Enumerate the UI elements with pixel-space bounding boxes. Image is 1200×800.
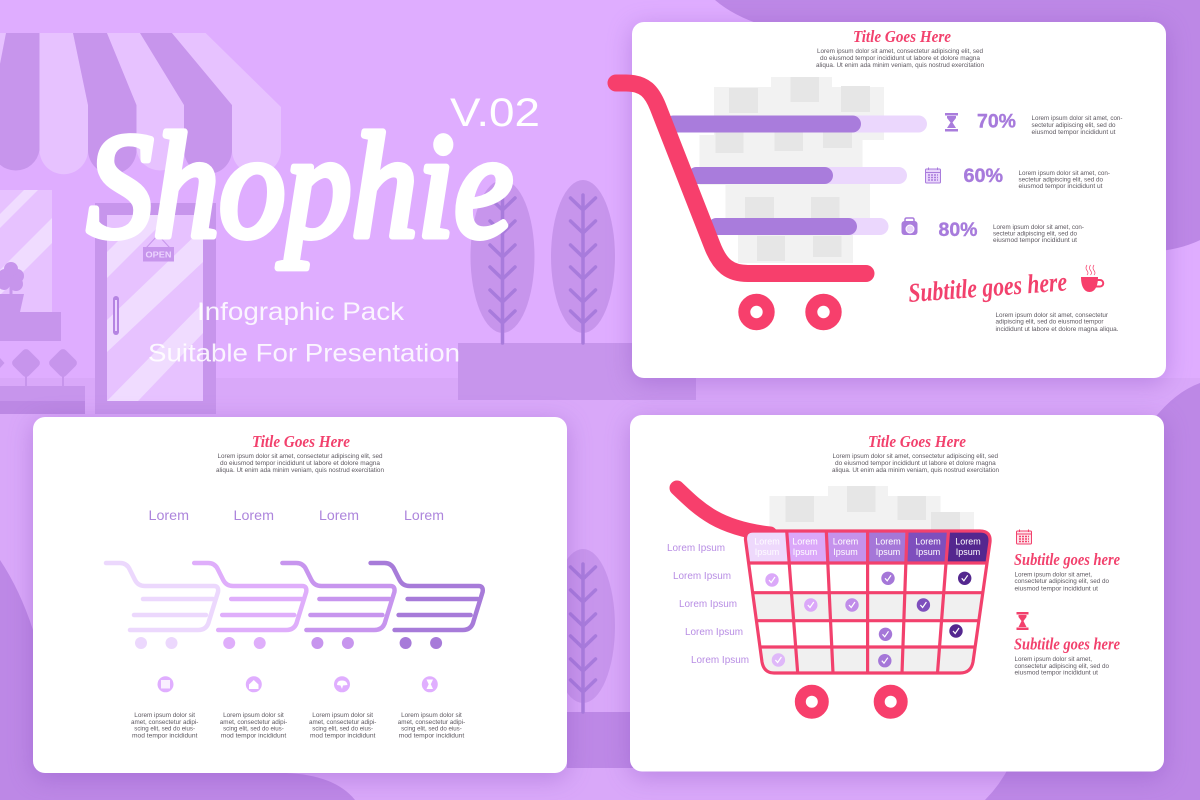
shop window: [0, 190, 52, 312]
open sign: OPEN: [146, 250, 172, 260]
intro text: Lorem ipsum dolor sit amet, consectetur adipiscing elit, sed: [218, 453, 383, 460]
subtitle 2: Subtitle goes here: [1014, 634, 1120, 654]
intro text: do eiusmod tempor incididunt ut labore et dolore magna: [835, 460, 996, 467]
column text 1: amet, consectetur adipi-: [131, 719, 198, 726]
header labels: Ipsum: [916, 547, 940, 557]
intro text: aliqua. Ut enim ada minim veniam, quis nostrud exercitation: [216, 467, 385, 474]
text block 60%: Lorem ipsum dolor sit amet, con-: [1018, 170, 1110, 177]
column text 3: [309, 712, 376, 739]
header labels: [754, 536, 981, 557]
cart wheel right: [811, 300, 836, 324]
tree 1: [470, 180, 534, 343]
icon: hourglass badge: [422, 676, 438, 692]
icon: hourglass: [1016, 612, 1028, 630]
header labels: Ipsum: [833, 547, 858, 557]
column text 1: [131, 712, 198, 739]
bar 70%: [665, 116, 927, 132]
icon: calendar badge: [158, 676, 174, 692]
awning: [0, 33, 281, 174]
column text 3: scing elit, sed do eius-: [312, 726, 373, 733]
version: V.02: [450, 91, 540, 135]
column text 3: mod tempor incididunt: [310, 732, 376, 739]
header labels: Ipsum: [755, 547, 779, 557]
icon: home badge: [246, 676, 262, 692]
header labels: Lorem: [792, 536, 818, 546]
text block 2: consectetur adipiscing elit, sed do: [1014, 663, 1110, 670]
intro text: do eiusmod tempor incididunt ut labore et dolore magna: [820, 55, 981, 62]
column text 4: amet, consectetur adipi-: [398, 719, 465, 726]
panel: four carts: [33, 417, 567, 773]
cart 4: [371, 563, 483, 649]
subtitle: Subtitle goes here: [907, 266, 1068, 308]
subtitle text: Lorem ipsum dolor sit amet, consectetur: [996, 312, 1108, 319]
row labels: Lorem Ipsum: [679, 599, 737, 610]
text block 2: Lorem ipsum dolor sit amet,: [1014, 656, 1092, 663]
row labels: Lorem Ipsum: [667, 543, 725, 554]
door: [95, 203, 216, 414]
column text 2: [220, 712, 287, 739]
row labels: [667, 543, 749, 666]
column text 2: mod tempor incididunt: [221, 732, 287, 739]
title: Title Goes Here: [853, 27, 951, 46]
grey boxes in cart: [770, 486, 974, 532]
column text 2: scing elit, sed do eius-: [223, 726, 284, 733]
icon: calendar: [1016, 530, 1032, 544]
header labels: Ipsum: [793, 547, 817, 557]
tree 2: [551, 180, 615, 343]
column text 4: mod tempor incididunt: [399, 732, 465, 739]
potted plant: [0, 262, 24, 312]
table fills: [747, 532, 988, 672]
value 60%: 60%: [964, 165, 1003, 187]
header labels: Lorem: [915, 536, 941, 546]
column labels: Lorem: [234, 508, 274, 523]
text block 70%: sectetur adipiscing elit, sed do: [1032, 122, 1116, 129]
intro text: aliqua. Ut enim ada minim veniam, quis nostrud exercitation: [832, 467, 1000, 474]
intro text: Lorem ipsum dolor sit amet, consectetur adipiscing elit, sed: [817, 48, 984, 55]
text block 2: [1014, 656, 1110, 677]
row labels: Lorem Ipsum: [685, 627, 743, 638]
panel: comparison cart table: [630, 415, 1164, 772]
icon: calendar: [926, 168, 940, 183]
subtitle line 2: Suitable For Presentation: [148, 340, 460, 368]
intro text: aliqua. Ut enim ada minim veniam, quis nostrud exercitation: [816, 62, 985, 69]
text block 80%: sectetur adipiscing elit, sed do: [993, 230, 1078, 238]
text block 1: [1014, 571, 1110, 592]
shopping cart frame: [616, 83, 866, 274]
value 70%: 70%: [977, 110, 1016, 132]
text block 80%: Lorem ipsum dolor sit amet, con-: [993, 224, 1084, 231]
title: Title Goes Here: [252, 432, 350, 451]
main title: Shophie: [87, 103, 513, 269]
subtitle line 1: Infographic Pack: [197, 298, 405, 326]
text block 70%: Lorem ipsum dolor sit amet, con-: [1032, 115, 1122, 122]
card background: [632, 22, 1166, 378]
card background: [33, 417, 567, 773]
icon: coffee cup: [1081, 265, 1103, 292]
header labels: Ipsum: [956, 547, 980, 557]
intro text: [216, 453, 385, 474]
column text 4: Lorem ipsum dolor sit: [401, 712, 462, 719]
header labels: Lorem: [875, 536, 901, 546]
column text 2: Lorem ipsum dolor sit: [223, 712, 284, 719]
icon: cloud badge: [334, 676, 350, 692]
text block 60%: sectetur adipiscing elit, sed do: [1018, 176, 1104, 184]
subtitle text: [996, 312, 1119, 333]
ledges and shrubs: [0, 312, 85, 414]
cart 2: [194, 563, 306, 649]
row labels: Lorem Ipsum: [691, 655, 749, 666]
intro text: [816, 48, 985, 69]
text block 2: eiusmod tempor incididunt ut: [1014, 670, 1098, 677]
column labels: [148, 508, 444, 523]
text block 80%: eiusmod tempor incididunt ut: [993, 237, 1077, 244]
text block 70%: eiusmod tempor incididunt ut: [1032, 129, 1116, 136]
check marks: [765, 572, 971, 667]
bar 80%: [708, 218, 888, 235]
table grid: [745, 531, 990, 673]
column text 4: [398, 712, 465, 739]
intro text: do eiusmod tempor incididunt ut labore et dolore magna: [220, 460, 381, 467]
subtitle text: incididunt ut labore et dolore magna aliqua.: [996, 326, 1119, 333]
text block 70%: [1032, 115, 1122, 136]
value 80%: 80%: [938, 219, 978, 241]
row labels: Lorem Ipsum: [673, 571, 731, 582]
cart 1: [106, 563, 218, 649]
column text 1: mod tempor incididunt: [132, 732, 198, 739]
cart wheel right: [879, 690, 902, 713]
storefront illustration: [0, 33, 281, 414]
grey boxes in cart: [700, 77, 884, 263]
text block 80%: [993, 224, 1084, 244]
cart handle: [677, 488, 770, 534]
text block 60%: eiusmod tempor incididunt ut: [1018, 183, 1103, 190]
icon: hourglass: [945, 113, 958, 132]
column text 1: Lorem ipsum dolor sit: [134, 712, 195, 719]
column labels: Lorem: [148, 508, 189, 523]
open sign: [143, 235, 174, 262]
subtitle text: adipiscing elit, sed do eiusmod tempor: [996, 318, 1104, 326]
column labels: Lorem: [319, 508, 359, 523]
title: Title Goes Here: [868, 432, 966, 451]
cart wheel left: [800, 690, 823, 713]
subtitle 1: Subtitle goes here: [1014, 550, 1120, 569]
planter and trees: [458, 180, 696, 768]
intro text: Lorem ipsum dolor sit amet, consectetur adipiscing elit, sed: [832, 453, 999, 460]
card background: [630, 415, 1164, 772]
text block 1: consectetur adipiscing elit, sed do: [1014, 578, 1110, 585]
column labels: Lorem: [404, 508, 444, 523]
column text 3: Lorem ipsum dolor sit: [312, 712, 373, 719]
text block 1: eiusmod tempor incididunt ut: [1014, 585, 1098, 592]
text block 60%: [1018, 170, 1110, 190]
header labels: Lorem: [955, 536, 981, 546]
icon: camera: [902, 218, 918, 235]
cart 3: [282, 563, 395, 649]
bar 60%: [688, 167, 907, 184]
column text 1: scing elit, sed do eius-: [134, 726, 195, 733]
column text 3: amet, consectetur adipi-: [309, 719, 376, 726]
column text 2: amet, consectetur adipi-: [220, 719, 287, 726]
cart wheel left: [744, 300, 769, 324]
panel: progress cart: [616, 22, 1166, 378]
text block 1: Lorem ipsum dolor sit amet,: [1014, 571, 1092, 578]
header labels: Lorem: [754, 536, 780, 546]
intro text: [832, 453, 1000, 474]
column text 4: scing elit, sed do eius-: [401, 726, 462, 733]
tree 3: [551, 549, 615, 712]
header labels: Lorem: [833, 536, 858, 546]
header labels: Ipsum: [876, 547, 900, 557]
